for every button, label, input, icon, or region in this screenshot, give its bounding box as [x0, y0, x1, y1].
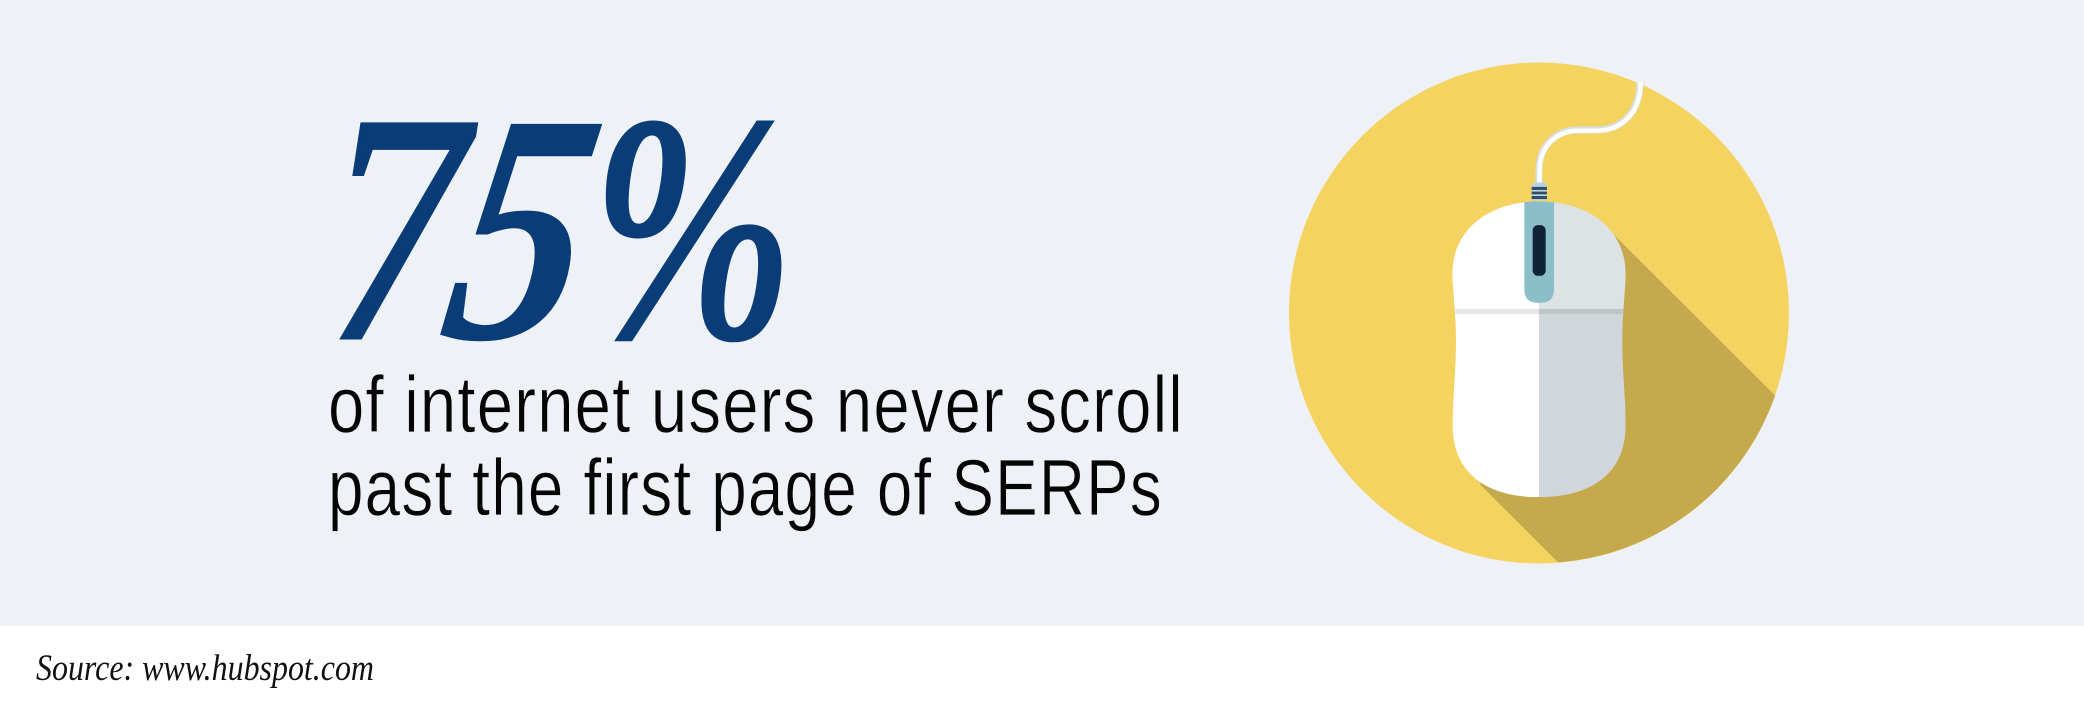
statistic: 75%: %	[590, 47, 794, 409]
statistic: 75%	[325, 47, 794, 409]
text block: statistic description	[328, 360, 1184, 532]
text block: statistic description: of internet users never scroll	[328, 360, 1184, 449]
cable connector	[1532, 182, 1547, 200]
mouse body	[1447, 195, 1629, 503]
statistic: 75%: 7	[325, 47, 480, 409]
scroll button	[1524, 195, 1554, 303]
icon: computer mouse in yellow circle	[1289, 62, 1789, 564]
yellow circle	[1289, 62, 1789, 564]
long shadow	[1480, 235, 1776, 562]
mouse body and connector	[1447, 182, 1629, 503]
statistic: 75%: 5	[424, 47, 623, 409]
mouse cable	[1539, 82, 1641, 184]
text block: statistic description: past the first page of SERPs	[328, 443, 1163, 532]
scroll wheel	[1533, 225, 1546, 276]
source note: Source: www.hubspot.com	[36, 648, 374, 689]
